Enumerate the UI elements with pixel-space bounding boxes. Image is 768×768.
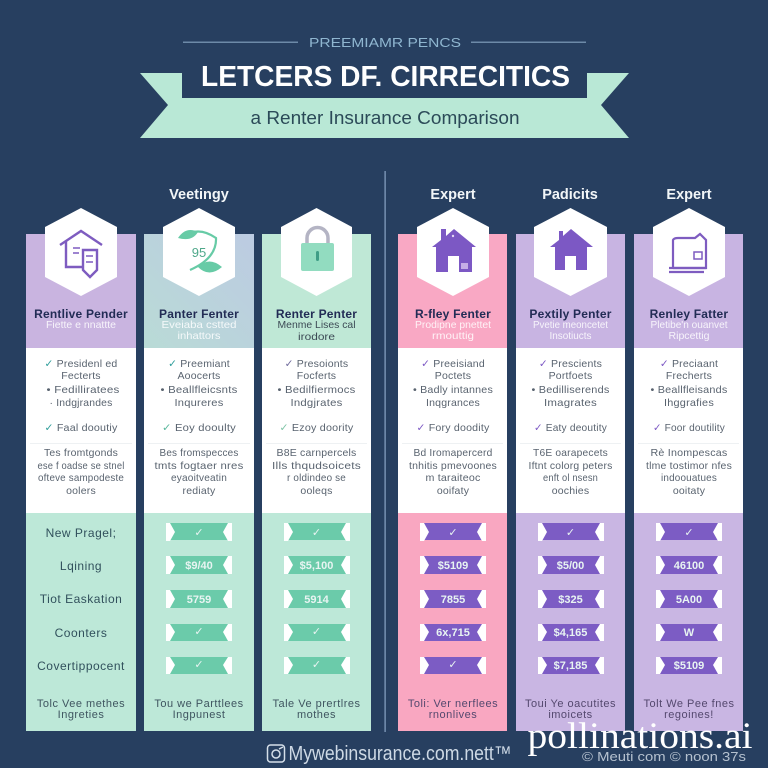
ribbon <box>656 556 722 574</box>
column 5: ✓ Prescients <box>539 358 602 370</box>
title banner <box>140 61 629 138</box>
ribbon: $5,100 <box>300 560 333 572</box>
column 4: R-fley Fenter <box>415 307 491 321</box>
column 6: • Beallfleisands <box>650 384 728 396</box>
column 3: irodore <box>298 331 335 343</box>
column 1: New Pragel; <box>46 526 116 540</box>
column 4: rmouttig <box>432 330 474 342</box>
column 2 <box>144 208 254 731</box>
column 1: ofteve sampodeste <box>38 472 124 484</box>
column 3: Focferts <box>297 370 336 382</box>
ribbon: 6x,715 <box>436 627 470 639</box>
column 6: ✓ Foor doutility <box>653 422 726 434</box>
column 4: rnonlives <box>429 709 477 721</box>
icon: purple house <box>550 229 593 270</box>
column 6: Rè Inompescas <box>650 447 728 459</box>
ribbon: ✓ <box>312 659 321 671</box>
column 5: Toui Ye oacutites <box>525 698 616 710</box>
column 3: Indgjrates <box>290 397 342 409</box>
column 6: Renley Fatter <box>650 307 728 321</box>
column 6 <box>634 208 743 731</box>
column 4: Toli: Ver nerflees <box>408 698 498 710</box>
column 1: Lqining <box>60 559 102 573</box>
column 5: Imagrates <box>544 397 597 409</box>
footer credits: © Meuti com © noon 37s <box>582 750 746 764</box>
column 2: Ingpunest <box>173 709 225 721</box>
icon: social badge <box>268 745 284 762</box>
column 2: rediaty <box>183 485 216 497</box>
ribbon <box>538 657 604 674</box>
column 2: Tou we Parttlees <box>154 698 244 710</box>
icon: padlock <box>301 228 334 271</box>
column 6: ooitaty <box>673 485 706 497</box>
ribbon: ✓ <box>684 527 694 539</box>
ribbon <box>538 590 604 608</box>
ribbon <box>284 556 350 574</box>
subtitle: a Renter Insurance Comparison <box>250 107 520 128</box>
ribbon <box>420 657 486 674</box>
column 2: inhattors <box>178 330 220 342</box>
ribbon: ✓ <box>566 527 575 539</box>
column 4: tnhitis pmevoones <box>409 460 497 472</box>
column 6: regoines! <box>664 709 714 721</box>
column 4: Inqgrances <box>426 397 480 409</box>
group heading: Expert: Expert <box>666 187 712 203</box>
ribbon: ✓ <box>194 659 204 671</box>
ribbon: ✓ <box>194 626 204 638</box>
column 6: ✓ Preciaant <box>660 358 718 370</box>
ribbon <box>166 523 232 541</box>
column 4: Bd Iromapercerd <box>414 447 492 459</box>
ribbon <box>284 657 350 674</box>
ribbon: 46100 <box>674 560 704 572</box>
column 1: Fiette e nnattte <box>46 319 116 331</box>
column 5: • Bedilliserends <box>532 384 610 396</box>
column 4: ooifaty <box>437 485 470 497</box>
ribbon: $5109 <box>438 560 468 572</box>
column 4: ✓ Preeisiand <box>421 358 485 370</box>
column 6: Ripcettig <box>668 330 710 342</box>
ribbon: ✓ <box>194 527 204 539</box>
ribbon <box>284 590 350 608</box>
ribbon: 5A00 <box>676 594 702 606</box>
ribbon <box>538 624 604 641</box>
column 5: imoicets <box>548 709 593 721</box>
column 2: • Beallfleicsnts <box>160 384 238 396</box>
column 2: ✓ Eoy dooulty <box>162 422 237 434</box>
column 3: ✓ Ezoy doority <box>280 422 354 434</box>
ribbon <box>420 556 486 574</box>
column 1: Coonters <box>55 626 107 640</box>
ribbon: ✓ <box>448 659 458 671</box>
column 3: ✓ Presoionts <box>285 358 348 370</box>
column 6: indoouatues <box>661 472 717 484</box>
column 2: Bes fromspecces <box>160 447 238 459</box>
group heading: Veetingy: Veetingy <box>169 187 229 203</box>
group heading: Expert: Expert <box>430 187 476 203</box>
column 3: r oldindeo se <box>287 472 346 484</box>
column 3: mothes <box>297 709 336 721</box>
column 3: Menme Lises cal <box>278 319 356 331</box>
icon: folder document <box>669 234 706 272</box>
column 6: tlme tostimor nfes <box>646 460 732 472</box>
column 1: ese f oadse se stnel <box>38 460 124 472</box>
column 2: eyaoitveatin <box>171 472 227 484</box>
column 1: Tolc Vee methes <box>37 698 125 710</box>
column 3: ooleqs <box>300 485 333 497</box>
column 1: • Fedilliratees <box>46 384 120 396</box>
ribbon <box>420 624 486 641</box>
column 5: T6E oarapecets <box>533 447 608 459</box>
column 5 <box>516 208 625 731</box>
column 6: Tolt We Pee fnes <box>644 698 734 710</box>
column 3: • Bedilfiermocs <box>278 384 356 396</box>
ribbon: $4,165 <box>554 627 587 639</box>
column 2: Eveiaba cstted <box>162 319 237 331</box>
ribbon <box>166 624 232 641</box>
column 4: • Badly intannes <box>413 384 493 396</box>
ribbon <box>656 590 722 608</box>
icon: leaves shield: 95 <box>192 245 206 260</box>
column 1: Rentlive Pender <box>34 307 128 321</box>
column 1: Ingreties <box>58 709 104 721</box>
ribbon <box>656 523 722 541</box>
ribbon <box>538 556 604 574</box>
ribbon: 7855 <box>441 594 465 606</box>
column 1: Covertippocent <box>37 659 125 673</box>
footer website: Mywebinsurance.com.nett™ <box>288 743 512 765</box>
ribbon <box>166 556 232 574</box>
column 3: Tale Ve prertlres <box>273 698 360 710</box>
column 6: Ihggrafies <box>664 397 714 409</box>
column 4 <box>398 208 507 731</box>
column 2: Inqureres <box>174 397 224 409</box>
column 5: ✓ Eaty deoutity <box>534 422 608 434</box>
ribbon <box>656 624 722 641</box>
ribbon: W <box>684 627 695 639</box>
column 1: · Indgjrandes <box>50 397 112 409</box>
column 2: ✓ Preemiant <box>168 358 230 370</box>
ribbon <box>284 624 350 641</box>
column 1: Tes fromtgonds <box>44 447 118 459</box>
column 5: Pvetie meoncetet <box>533 319 608 331</box>
column 3: Ills thqudsoicets <box>272 460 361 472</box>
column 5: Pextily Penter <box>529 307 612 321</box>
column 6: Frecherts <box>666 370 712 382</box>
column 5: Iftnt colorg peters <box>528 460 612 472</box>
column 4: ✓ Fory doodity <box>416 422 490 434</box>
group heading: Padicits: Padicits <box>542 187 598 203</box>
column 1: ✓ Faal dooutiy <box>44 422 118 434</box>
column 5: oochies <box>552 485 589 497</box>
column 1: Tiot Easkation <box>40 592 122 606</box>
column 1: Fecterts <box>61 370 101 382</box>
column 1: oolers <box>66 485 96 497</box>
ribbon: $5109 <box>674 660 704 672</box>
icon: leaves shield <box>178 230 222 272</box>
ribbon: ✓ <box>312 626 321 638</box>
column 4: Poctets <box>435 370 471 382</box>
ribbon <box>166 657 232 674</box>
icon: purple house <box>432 229 476 272</box>
column 4: Prodipne pnettet <box>415 319 491 331</box>
column 4: m taraiteoc <box>426 472 480 484</box>
ribbon: $9/40 <box>185 560 213 572</box>
column 5: Portfoets <box>549 370 592 382</box>
column 2: Panter Fenter <box>159 307 239 321</box>
watermark: pollinations.ai <box>528 716 752 757</box>
icon: house with document <box>60 231 102 277</box>
column 3: Renter Penter <box>276 307 357 321</box>
column 3: B8E carnpercels <box>276 447 356 459</box>
ribbon <box>166 590 232 608</box>
column 1 <box>26 208 136 731</box>
ribbon: ✓ <box>448 527 458 539</box>
ribbon <box>420 523 486 541</box>
ribbon: $7,185 <box>554 660 587 672</box>
ribbon: 5914 <box>304 594 330 606</box>
column 2: tmts fogtaer nres <box>154 460 244 472</box>
column 2: Aoocerts <box>177 370 221 382</box>
ribbon: 5759 <box>187 594 211 606</box>
column 1: ✓ Presidenl ed <box>45 358 117 370</box>
ribbon <box>420 590 486 608</box>
center divider <box>384 171 386 732</box>
column 6: Pletibe'n ouanvet <box>650 319 728 331</box>
ribbon: $5/00 <box>557 560 584 572</box>
column 5: Insotiucts <box>550 330 592 342</box>
ribbon <box>656 657 722 674</box>
column 3 <box>262 208 371 731</box>
column 5: enft ol nsesn <box>543 472 598 484</box>
ribbon: $325 <box>558 594 583 606</box>
title: LETCERS DF. CIRRECITICS <box>201 61 570 93</box>
ribbon <box>284 523 350 541</box>
ribbon <box>538 523 604 541</box>
header eyebrow: PREEMIAMR PENCS <box>309 35 461 50</box>
ribbon: ✓ <box>312 527 321 539</box>
